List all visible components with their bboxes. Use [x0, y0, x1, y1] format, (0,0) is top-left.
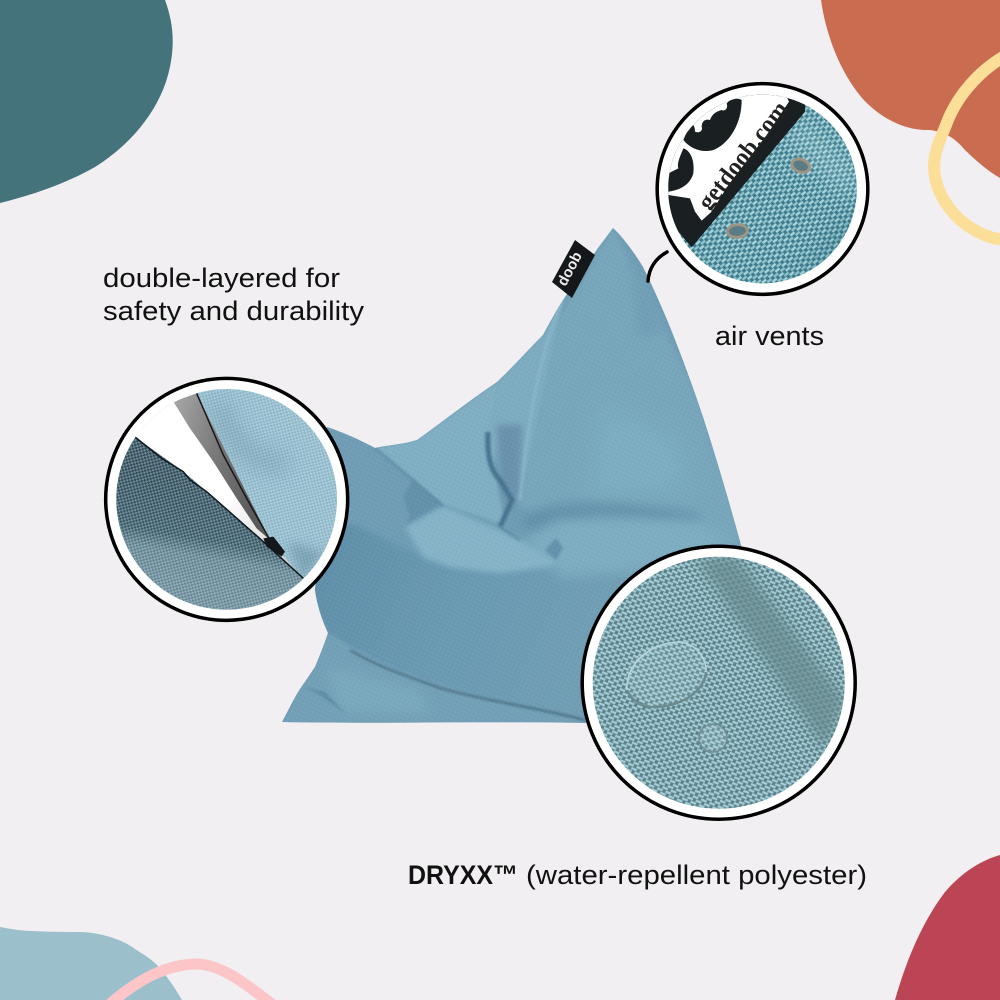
label: water-repellent fabric: (water-repellent polyester) [526, 860, 867, 890]
open zipper white lining [136, 393, 298, 572]
label: zipper [103, 263, 365, 326]
eyelet top [790, 158, 811, 174]
corner crease [309, 688, 343, 711]
left corner panel [328, 427, 375, 448]
grey inner lining [173, 393, 270, 540]
seat highlight [405, 506, 557, 573]
label: water-repellent fabric [408, 860, 867, 890]
connector line: air vents [648, 252, 667, 281]
label: air vents: air vents [715, 321, 824, 351]
bean bag [282, 228, 742, 723]
decorative blob: light blue bottom left [0, 927, 182, 1000]
triangular shadow [404, 482, 438, 523]
large water drop [626, 641, 708, 708]
label text: getdoob.com [692, 96, 794, 215]
main crease [488, 432, 512, 527]
lower left fabric [116, 437, 303, 610]
zipper pull [263, 537, 285, 557]
shadow above seat [528, 501, 697, 528]
upper right fabric [116, 389, 337, 610]
white label [660, 90, 789, 221]
notch shadow [545, 538, 563, 560]
decorative ring: yellow top right [934, 57, 1000, 240]
seam [135, 437, 303, 578]
brand tag on bag: doob [554, 249, 586, 289]
label: zipper: safety and durability [103, 296, 365, 326]
fabric [668, 94, 857, 284]
decorative blob: teal top left [0, 0, 173, 203]
upper back panel [515, 228, 745, 545]
bottom flap [282, 633, 590, 722]
brand tag on bag [552, 240, 595, 298]
decorative blob: orange top right [821, 0, 1000, 178]
callout circle: air vents detail [657, 84, 868, 297]
decorative blob: crimson bottom right [895, 855, 1000, 1000]
eyelet bottom [727, 224, 748, 238]
logo blob left [668, 148, 694, 192]
decorative ring: pink bottom left [110, 964, 272, 1000]
label: water-repellent fabric: DRYXX™ [408, 860, 518, 890]
dark fold band [697, 555, 845, 750]
fold shadow [350, 650, 585, 720]
small water drop [699, 724, 727, 752]
fabric texture [270, 220, 770, 730]
callout circle: water repellent fabric [582, 546, 855, 819]
logo blob right [683, 99, 742, 151]
left crease shadows [375, 448, 443, 506]
seat right highlight [522, 517, 735, 578]
callout circle: zipper detail [103, 378, 348, 620]
upper left panel [375, 382, 505, 525]
front panel [315, 524, 424, 657]
label: zipper: double-layered for [103, 263, 340, 293]
inner seam panel [496, 306, 559, 454]
black label band [660, 90, 805, 247]
